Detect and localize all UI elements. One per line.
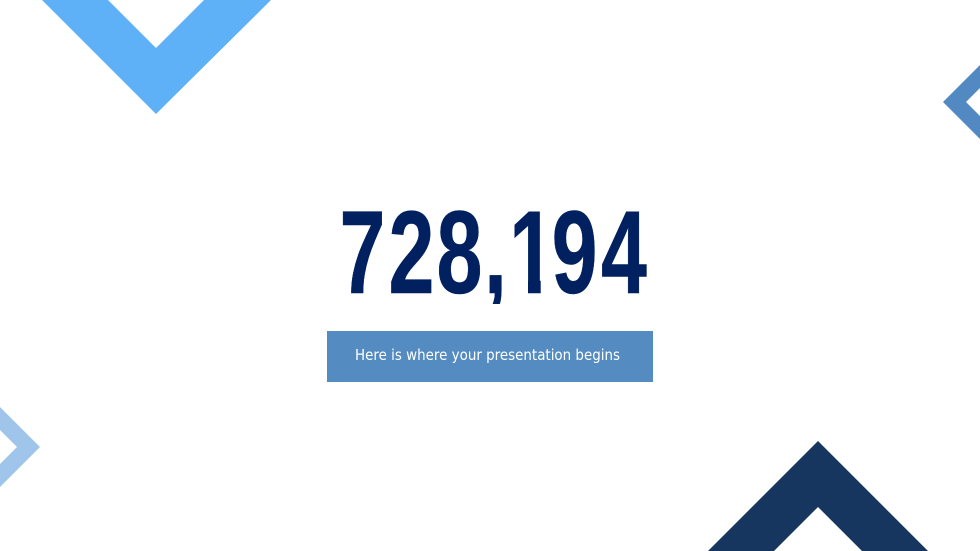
- chevron: bottom right, navy: [708, 441, 928, 551]
- chevron: top left, light blue: [42, 0, 271, 114]
- chevron: left edge, pale blue: [0, 407, 40, 487]
- chevron: right edge, mid blue: [943, 65, 980, 139]
- banner text: Here is where your presentation begins: [355, 346, 620, 364]
- subtitle banner: [327, 331, 653, 382]
- banner background: [327, 331, 653, 382]
- big number: 728,194: [339, 186, 647, 318]
